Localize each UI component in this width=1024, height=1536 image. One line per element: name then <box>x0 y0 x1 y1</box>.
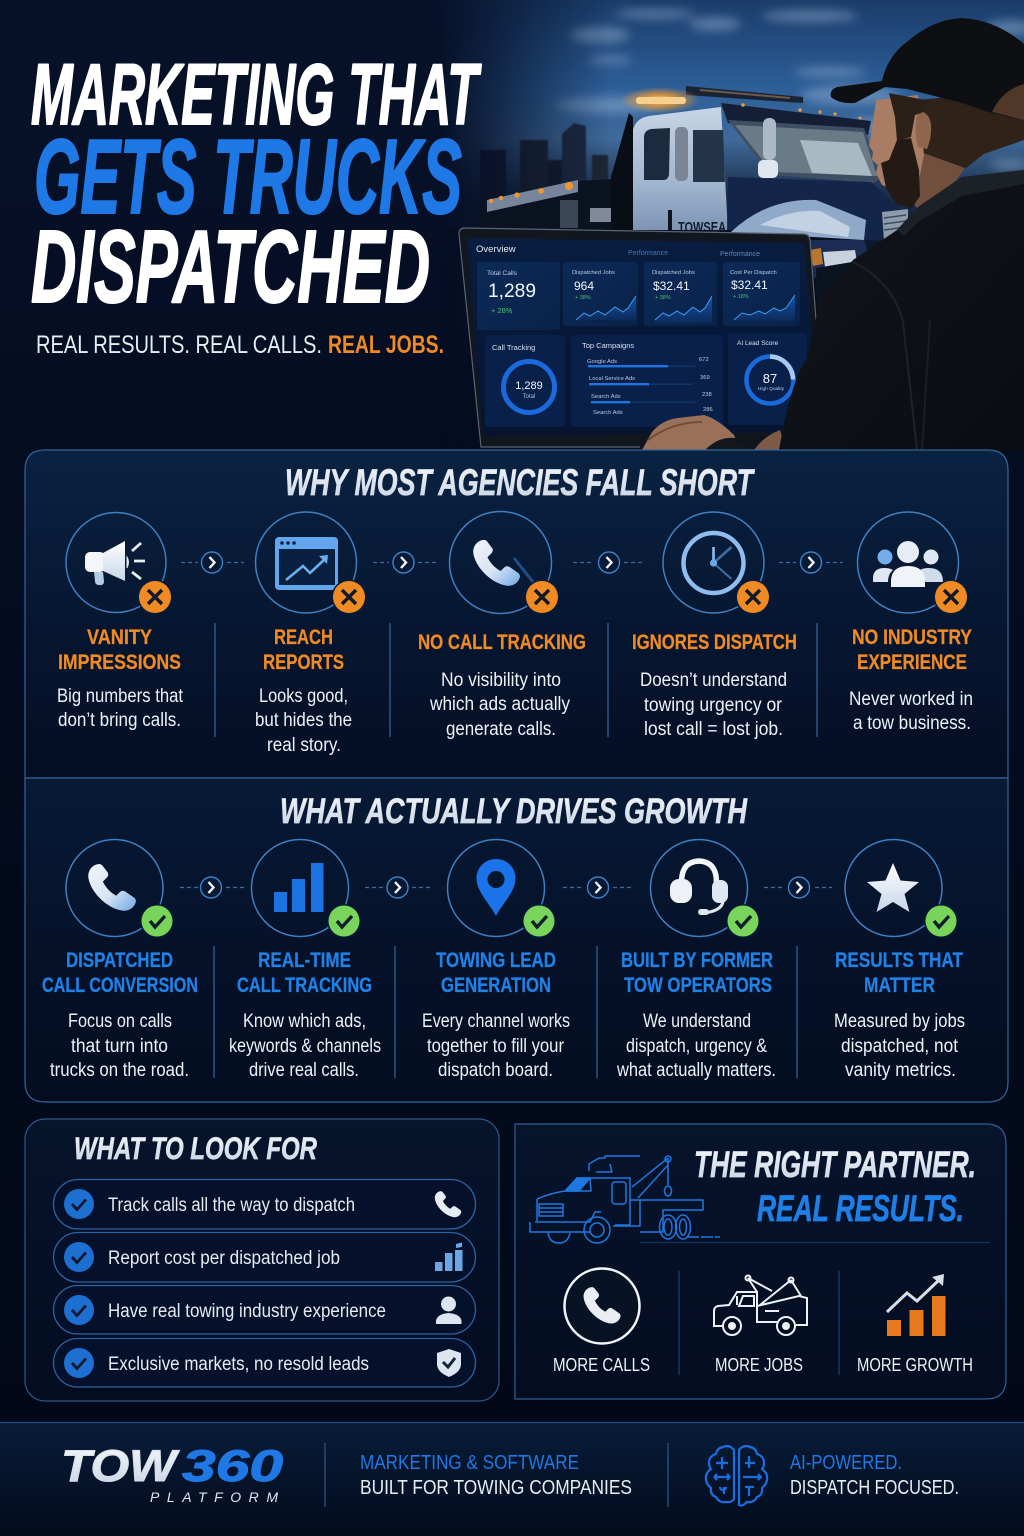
heading: WHAT ACTUALLY DRIVES GROWTH <box>280 791 748 831</box>
benefit: more jobs: MORE JOBS <box>715 1355 803 1375</box>
panel: the right partner <box>515 1124 1006 1399</box>
top campaigns card: Search Ads <box>591 394 621 400</box>
metric card: total calls: 1,289 <box>488 281 536 302</box>
metric card: total calls: Total Calls <box>487 270 518 277</box>
subtitle: REAL JOBS. <box>328 331 444 359</box>
description: Doesn’t understand <box>640 670 787 691</box>
description: towing urgency or <box>644 695 783 716</box>
label: IGNORES DISPATCH <box>632 631 797 654</box>
description: No visibility into <box>441 670 561 691</box>
description: dispatch board. <box>438 1060 553 1081</box>
badge: x <box>138 580 172 614</box>
icon: bar chart <box>274 863 324 912</box>
panel: what actually drives growth <box>25 778 1008 1102</box>
badge: check <box>924 904 958 938</box>
icon: AI brain <box>706 1446 767 1506</box>
icon: growth chart <box>887 1274 946 1336</box>
logo: TOW <box>61 1442 180 1491</box>
description: what actually matters. <box>616 1060 776 1081</box>
description: lost call = lost job. <box>644 719 783 740</box>
tagline: marketing and software <box>360 1452 632 1499</box>
badge: check <box>140 904 174 938</box>
panel: why most agencies fall short <box>25 450 1008 778</box>
description <box>640 670 787 740</box>
description: drive real calls. <box>249 1060 359 1081</box>
label: REAL-TIME <box>258 949 351 972</box>
badge: x <box>332 580 366 614</box>
tagline: marketing and software: MARKETING & SOFTWARE <box>360 1452 579 1474</box>
label: NO INDUSTRY <box>852 626 972 649</box>
item: reach reports: REPORTS <box>263 651 344 674</box>
top campaigns card: Top Campaigns <box>582 341 634 350</box>
laptop <box>459 228 822 450</box>
icon: white tow truck <box>714 1276 807 1335</box>
item: built by former tow operators <box>616 840 776 1081</box>
item: no industry experience: EXPERIENCE <box>857 651 967 674</box>
badge: check <box>522 904 556 938</box>
icon: phone <box>473 540 533 586</box>
tagline: AI-powered: DISPATCH FOCUSED. <box>790 1477 959 1499</box>
metric card: cost per dispatch: $32.41 <box>731 278 768 292</box>
row: track calls <box>54 1180 476 1229</box>
icon: phone <box>88 864 136 911</box>
label: TOWING LEAD <box>436 949 556 972</box>
tagline: marketing and software: BUILT FOR TOWING COMPANIES <box>360 1477 632 1499</box>
hero photo: tow truck, skyline, operator and laptop <box>400 0 1024 450</box>
icon: clock <box>684 533 744 593</box>
item: dispatched call conversion <box>42 840 198 1081</box>
metric card: total calls: + 28% <box>491 306 513 315</box>
metric card: dispatched jobs: + 38% <box>575 295 591 301</box>
metric card: dispatched jobs: Dispatched Jobs <box>572 270 615 276</box>
operator: head, cap and jacket <box>779 18 1024 450</box>
item: vanity impressions <box>57 512 184 731</box>
item: reach reports <box>255 512 366 756</box>
heading: WHAT TO LOOK FOR <box>74 1130 317 1166</box>
benefit: more jobs <box>714 1276 807 1375</box>
row: exclusive markets: Exclusive markets, no resold leads <box>108 1354 369 1375</box>
call tracking card: Call Tracking <box>492 343 535 352</box>
logo <box>61 1442 283 1505</box>
laptop: Performance <box>628 250 668 257</box>
top campaigns card: Google Ads <box>587 359 617 365</box>
sky, clouds and skyline fading into the background <box>455 0 1024 248</box>
subtitle: REAL RESULTS. REAL CALLS. <box>36 331 322 359</box>
description: that turn into <box>71 1036 168 1057</box>
item: towing lead generation: GENERATION <box>441 974 551 997</box>
description <box>834 1011 965 1081</box>
description: keywords & channels <box>229 1036 381 1057</box>
badge: check <box>726 904 760 938</box>
description: together to fill your <box>427 1036 565 1057</box>
row: track calls: Track calls all the way to dispatch <box>108 1195 355 1216</box>
item: dispatched call conversion: CALL CONVERSION <box>42 974 198 997</box>
flatbed <box>478 179 622 229</box>
AI lead score card: 87 <box>763 371 777 386</box>
label: RESULTS THAT <box>835 949 963 972</box>
benefit: more growth: MORE GROWTH <box>857 1355 973 1375</box>
description <box>849 689 973 734</box>
description: dispatch, urgency & <box>626 1036 767 1057</box>
icon: star <box>867 863 919 912</box>
call tracking card: 1,289 <box>515 380 543 392</box>
title: DISPATCHED <box>31 209 430 324</box>
footer band <box>0 1422 1024 1536</box>
description: Focus on calls <box>68 1011 172 1032</box>
row: report cost: Report cost per dispatched job <box>108 1248 340 1269</box>
logo: PLATFORM <box>150 1489 278 1505</box>
row: report cost <box>54 1232 476 1282</box>
benefit: more calls <box>553 1268 650 1375</box>
description: vanity metrics. <box>845 1060 956 1081</box>
item: real-time call tracking <box>229 840 381 1081</box>
hands on keyboard <box>642 415 786 450</box>
row: exclusive markets <box>54 1338 476 1387</box>
icon: shield <box>437 1349 461 1377</box>
description: which ads actually <box>429 694 570 715</box>
icon: people <box>873 541 943 587</box>
label: BUILT BY FORMER <box>621 949 773 972</box>
flow connectors <box>180 877 832 898</box>
metric card: dispatched jobs <box>563 262 638 326</box>
tagline: AI-powered <box>790 1452 959 1499</box>
heading: WHY MOST AGENCIES FALL SHORT <box>285 461 755 503</box>
item: built by former tow operators: TOW OPERATORS <box>624 974 772 997</box>
description <box>616 1011 776 1081</box>
row: towing experience: Have real towing industry experience <box>108 1301 386 1322</box>
metric card: cost: + 38% <box>655 295 671 301</box>
badge: check <box>327 904 361 938</box>
description: don’t bring calls. <box>58 710 181 731</box>
laptop: Performance <box>720 251 760 258</box>
description: trucks on the road. <box>50 1060 189 1081</box>
logo: 360 <box>182 1442 283 1491</box>
description <box>229 1011 381 1081</box>
icon: map pin <box>476 859 516 916</box>
item: towing lead generation <box>422 840 570 1081</box>
top campaigns card: 286 <box>703 407 713 413</box>
top campaigns card: Search Ads <box>593 410 623 416</box>
AI lead score card: High Quality <box>758 386 785 392</box>
warning light bars <box>620 86 862 120</box>
title: GETS TRUCKS <box>34 118 462 236</box>
badge: x <box>736 580 770 614</box>
item: real-time call tracking: CALL TRACKING <box>237 974 372 997</box>
icon: report window <box>275 537 338 590</box>
top campaigns card <box>571 335 723 427</box>
description: a tow business. <box>853 713 971 734</box>
icon: blue tow truck outline <box>530 1156 720 1243</box>
item: no industry experience <box>849 512 973 734</box>
label: VANITY <box>87 626 152 649</box>
description <box>429 670 570 740</box>
description: Big numbers that <box>57 686 184 707</box>
metric card: cost: Dispatched Jobs <box>652 270 695 276</box>
description: generate calls. <box>446 719 556 740</box>
benefit: more calls: MORE CALLS <box>553 1355 650 1375</box>
description: dispatched, not <box>841 1036 959 1057</box>
truck lettering: TOWSEA <box>678 219 726 236</box>
AI lead score card: AI Lead Score <box>737 340 779 347</box>
top campaigns card: 238 <box>702 392 712 398</box>
description: Every channel works <box>422 1011 570 1032</box>
metric card: total calls <box>477 262 560 330</box>
label: REACH <box>274 626 333 649</box>
flow connectors <box>181 552 843 573</box>
description: We understand <box>643 1011 751 1032</box>
AI lead score card <box>728 333 807 425</box>
description: Looks good, <box>259 686 348 707</box>
badge: x <box>524 580 560 614</box>
icon: bars <box>435 1242 462 1271</box>
item: results that matter <box>834 840 965 1081</box>
description: real story. <box>267 735 341 756</box>
description <box>422 1011 570 1081</box>
icon: headset <box>670 861 728 915</box>
call tracking card <box>485 335 565 427</box>
label: NO CALL TRACKING <box>418 631 586 654</box>
item: vanity impressions: IMPRESSIONS <box>58 651 181 674</box>
heading <box>694 1143 976 1229</box>
call tracking card: Total <box>523 394 535 400</box>
item: results that matter: MATTER <box>864 974 935 997</box>
top campaigns card: 672 <box>699 357 709 363</box>
badge: x <box>934 580 968 614</box>
metric card: cost: $32.41 <box>653 279 690 293</box>
description: Never worked in <box>849 689 973 710</box>
metric card: dispatched jobs: 964 <box>574 279 594 293</box>
item: no call tracking <box>418 512 586 740</box>
metric card: cost per dispatch: + 18% <box>733 294 749 300</box>
icon: phone <box>435 1191 461 1217</box>
item: ignores dispatch <box>632 512 797 740</box>
icon: person <box>436 1296 462 1324</box>
top campaigns card: 369 <box>700 375 710 381</box>
title <box>31 47 482 324</box>
description: Know which ads, <box>243 1011 366 1032</box>
icon: megaphone <box>85 541 145 585</box>
description: Measured by jobs <box>834 1011 965 1032</box>
description <box>50 1011 189 1081</box>
truck cab <box>611 103 908 320</box>
metric card: cost <box>644 262 717 326</box>
benefit: more growth <box>857 1274 973 1375</box>
metric card: cost per dispatch: Cost Per Dispatch <box>730 270 777 276</box>
title: MARKETING THAT <box>31 47 482 143</box>
top campaigns card: Local Service Ads <box>589 376 635 382</box>
label: DISPATCHED <box>66 949 173 972</box>
tagline: AI-powered: AI-POWERED. <box>790 1452 902 1474</box>
metric card: cost per dispatch <box>723 262 800 326</box>
description <box>255 686 352 756</box>
description: but hides the <box>255 710 352 731</box>
dashboard header: Overview <box>476 244 516 255</box>
description <box>57 686 184 731</box>
panel: what to look for <box>25 1119 499 1401</box>
row: towing experience <box>54 1286 476 1334</box>
